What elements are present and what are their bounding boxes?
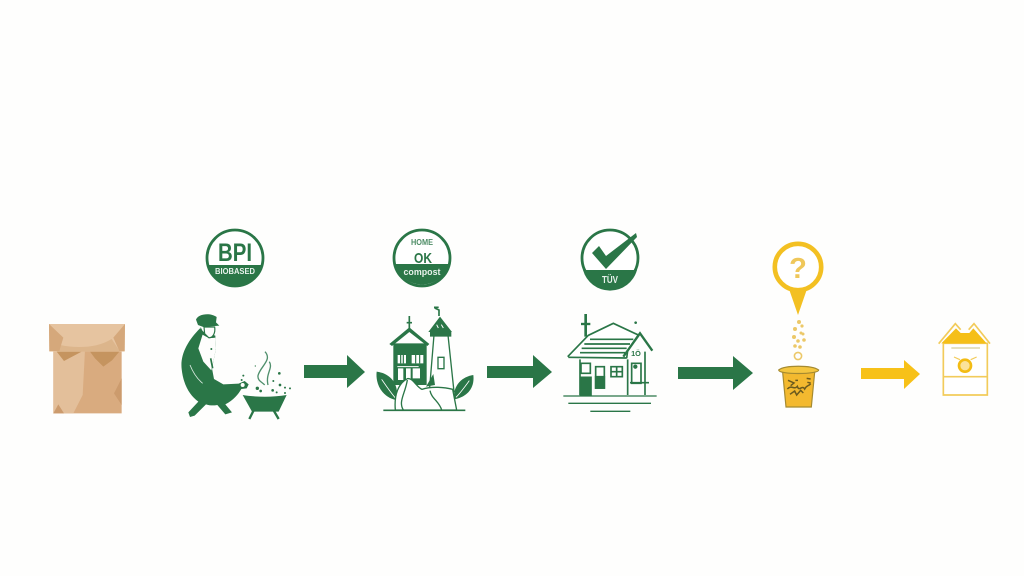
badge: OK compost: OK xyxy=(414,250,432,267)
icon: person tending a compost burner xyxy=(181,314,249,417)
body xyxy=(181,328,249,417)
right leaf xyxy=(454,375,474,399)
rock xyxy=(395,379,457,410)
badge: OK compost: compost xyxy=(404,267,440,277)
badge: BPI xyxy=(207,230,263,286)
icon: yellow compost cup xyxy=(779,366,819,407)
icon: house: 1Ö xyxy=(631,349,641,358)
badge: BPI: BIOBASED xyxy=(215,267,255,276)
icon: question mark pin: ? xyxy=(789,253,807,285)
arrow 4 xyxy=(861,360,920,389)
icon: house, lighthouse and leaves xyxy=(376,307,474,410)
left leaf xyxy=(376,372,397,400)
icon: kraft paper bag xyxy=(49,324,125,413)
arrow 3 xyxy=(678,356,753,390)
hat xyxy=(196,314,219,327)
arrow 2 xyxy=(487,355,552,388)
icon: falling particles xyxy=(792,320,806,360)
torso highlight xyxy=(198,334,216,370)
badge: OK compost: HOME xyxy=(411,238,434,247)
icon: compost burner with steam xyxy=(241,352,291,419)
badge: TUV check xyxy=(582,230,638,291)
icon: house xyxy=(563,314,657,411)
house xyxy=(393,343,427,385)
badge: TUV check: TÜV xyxy=(602,273,618,286)
badge: OK compost xyxy=(394,230,450,286)
badge: BPI: BPI xyxy=(218,239,252,267)
icon: yellow house box xyxy=(939,324,990,395)
face xyxy=(204,327,215,338)
icon: question mark pin xyxy=(775,244,821,315)
arrow 1 xyxy=(304,355,365,388)
lighthouse xyxy=(429,335,454,392)
